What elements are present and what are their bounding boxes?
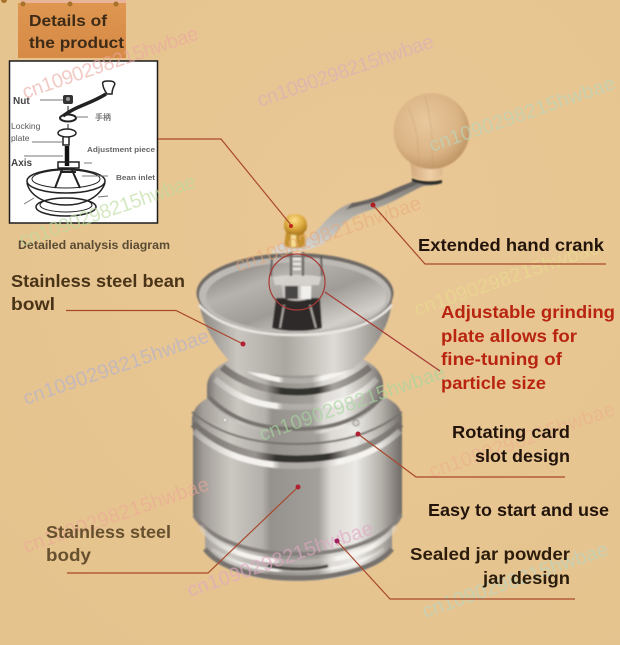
diagram labels: 手柄 <box>95 112 111 122</box>
label: adjustable grinding plate: plate allows for <box>441 326 577 346</box>
diagram labels: Bean inlet <box>116 175 156 182</box>
watermarks: cn1090298215hwbae <box>254 31 437 112</box>
brass nut <box>284 214 307 248</box>
diagram labels: Nut <box>13 96 30 107</box>
diagram labels: Axis <box>11 158 33 169</box>
label: sealed jar: jar design <box>482 568 570 588</box>
label: easy to start: Easy to start and use <box>428 500 609 520</box>
watermarks: cn1090298215hwbae <box>16 171 199 252</box>
callout: card slot leader line <box>356 432 565 477</box>
grinder base and body <box>192 356 402 581</box>
diagram labels: Locking <box>11 121 41 131</box>
watermarks: cn1090298215hwbae <box>411 236 603 321</box>
callout: body leader line <box>67 484 300 573</box>
label: extended hand crank: Extended hand crank <box>418 235 604 255</box>
watermarks: cn1090298215hwbae <box>426 398 618 483</box>
watermarks: cn1090298215hwbae <box>232 192 424 277</box>
callout: bowl leader line <box>66 310 246 346</box>
diagram labels <box>11 96 156 182</box>
callout: grinding plate circle and leader <box>269 254 440 371</box>
screw holes <box>223 418 227 422</box>
panel: exploded analysis diagram <box>10 61 158 223</box>
title plank <box>1 0 126 58</box>
label: stainless steel body: body <box>46 545 91 565</box>
hand crank <box>272 178 442 253</box>
callout: crank leader line <box>370 202 606 264</box>
grinder stem inside bowl <box>272 298 322 331</box>
label: adjustable grinding plate: fine-tuning of <box>441 349 562 369</box>
title text: Details of <box>29 13 108 30</box>
label: rotating card slot: slot design <box>475 446 570 466</box>
product: coffee grinder <box>192 93 470 581</box>
watermarks: cn1090298215hwbae <box>19 23 202 104</box>
label: rotating card slot: Rotating card <box>452 422 570 442</box>
watermarks: cn1090298215hwbae <box>184 517 376 602</box>
diagram labels: plate <box>11 133 30 143</box>
title text: the product <box>29 35 125 52</box>
label: stainless steel bean bowl: bowl <box>11 294 55 314</box>
label: adjustable grinding plate: particle size <box>441 373 546 393</box>
callout: jar leader line <box>334 538 575 599</box>
body shoulder band <box>192 400 402 460</box>
stepped collar <box>207 356 383 435</box>
callout: nut leader line <box>158 139 293 228</box>
icon: crank handle sketch <box>24 81 115 216</box>
watermarks: cn1090298215hwbae <box>256 361 448 446</box>
wooden knob <box>394 93 470 180</box>
diagram caption: Detailed analysis diagram <box>18 240 170 252</box>
label: adjustable grinding plate: Adjustable grinding <box>441 302 615 322</box>
bean bowl <box>196 252 394 376</box>
watermarks: cn1090298215hwbae <box>20 473 212 558</box>
watermarks: cn1090298215hwbae <box>426 72 618 157</box>
label: stainless steel body: Stainless steel <box>46 522 171 542</box>
label: sealed jar: Sealed jar powder <box>410 544 570 564</box>
watermarks: cn1090298215hwbae <box>419 538 611 623</box>
diagram labels: Adjustment piece <box>87 147 155 154</box>
label: stainless steel bean bowl: Stainless steel bean <box>11 271 185 291</box>
watermarks: cn1090298215hwbae <box>20 325 212 410</box>
